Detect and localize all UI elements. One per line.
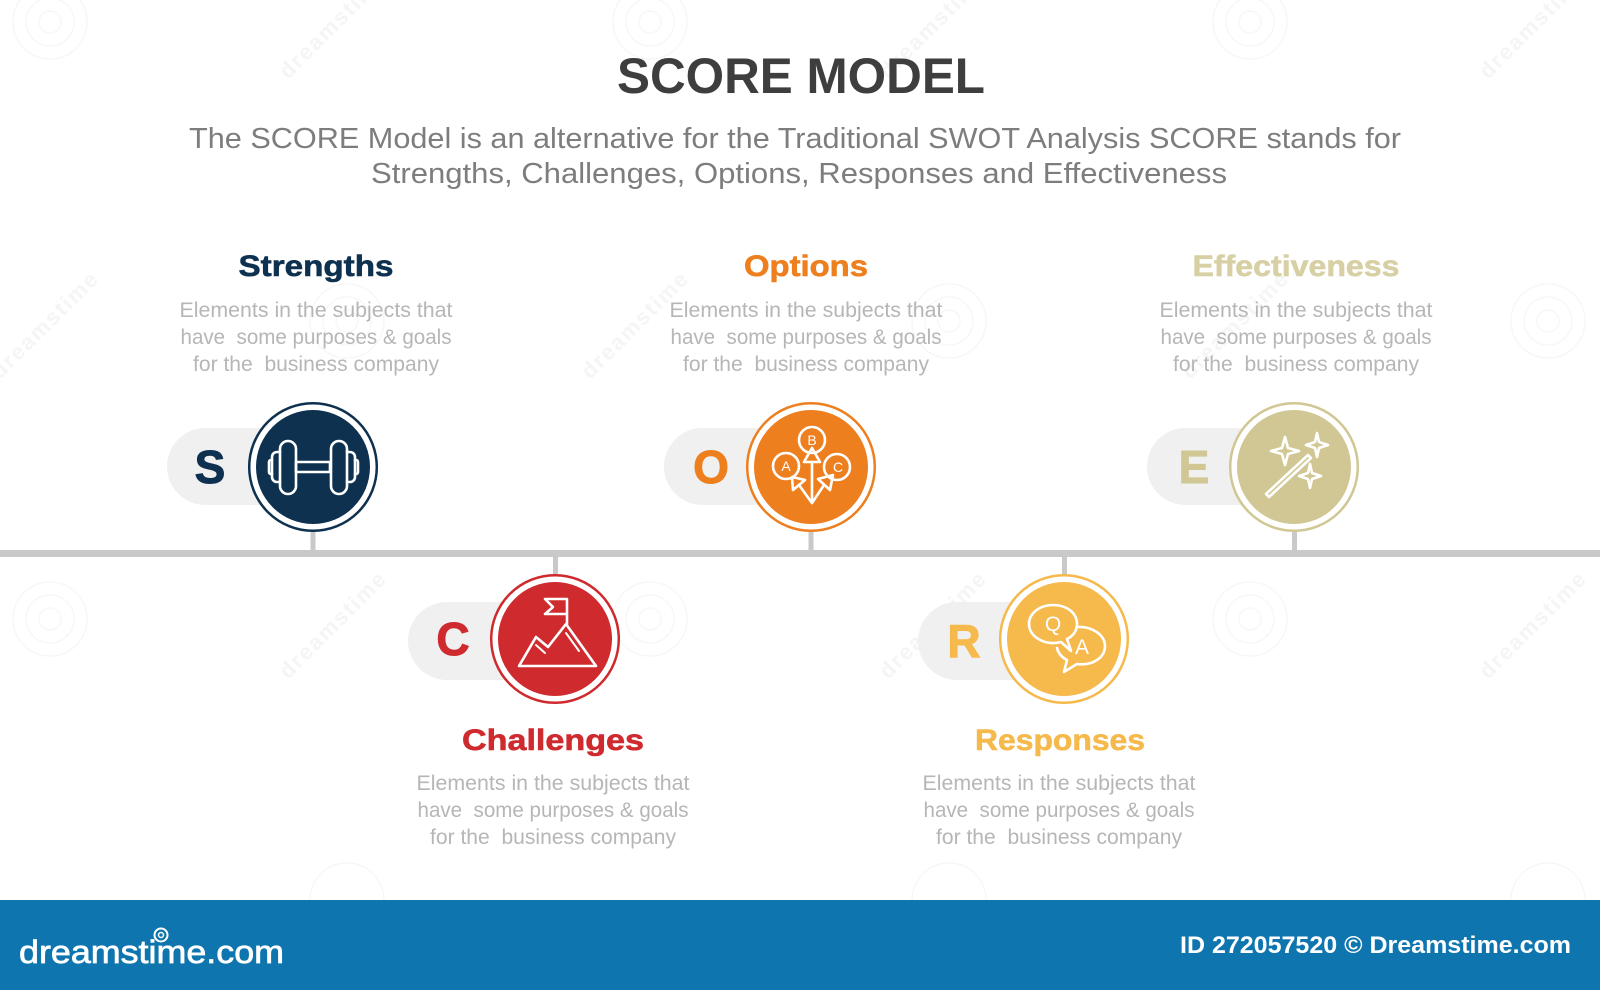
- letter pill: S: S: [195, 441, 225, 493]
- heading: effectiveness: Effectiveness: [1192, 250, 1400, 283]
- letter pill: O: [664, 428, 834, 505]
- heading: options: Options: [744, 250, 868, 283]
- text block: options description: for the business company: [683, 353, 929, 376]
- text block: responses description: for the business company: [936, 826, 1182, 849]
- panel: options: [664, 250, 943, 531]
- text block: strengths description: [180, 299, 453, 376]
- letter pill: C: [408, 602, 578, 680]
- text block: effectiveness description: Elements in the subjects that: [1160, 299, 1433, 322]
- text block: responses description: Elements in the subjects that: [922, 772, 1196, 795]
- text block: strengths description: have some purposes & goals: [180, 326, 452, 349]
- subtitle: [189, 123, 1401, 190]
- letter pill: O: O: [693, 441, 729, 493]
- panel: responses: [918, 575, 1196, 849]
- letter pill: E: [1147, 428, 1317, 505]
- icon: magic wand: [1230, 403, 1358, 531]
- heading: responses: Responses: [975, 724, 1145, 757]
- panel: effectiveness: [1147, 250, 1433, 531]
- icon: options A B C arrows: A: [781, 458, 791, 474]
- icon: Q and A speech bubbles: [1000, 575, 1128, 703]
- panel: challenges: [408, 575, 690, 849]
- letter pill: C: C: [436, 613, 470, 665]
- text block: effectiveness description: for the business company: [1173, 353, 1419, 376]
- text block: responses description: have some purposes & goals: [924, 799, 1194, 822]
- icon: options A B C arrows: B: [807, 432, 817, 448]
- text block: responses description: [922, 772, 1196, 849]
- heading: strengths: Strengths: [238, 250, 394, 283]
- icon: options A B C arrows: C: [833, 459, 843, 475]
- text block: challenges description: have some purposes & goals: [418, 799, 688, 822]
- timeline axis: [0, 530, 1600, 577]
- text block: effectiveness description: have some purposes & goals: [1160, 326, 1432, 349]
- text: dreamstime: [1474, 567, 1591, 684]
- text block: options description: Elements in the subjects that: [670, 299, 943, 322]
- icon: options A B C arrows: [747, 403, 875, 531]
- footer bar: [0, 900, 1600, 990]
- image id credit: ID 272057520 © Dreamstime.com: [1180, 932, 1571, 959]
- text: dreamstime: [874, 567, 991, 684]
- letter pill: S: [167, 428, 337, 505]
- icon: Q and A speech bubbles: Q: [1045, 613, 1061, 636]
- text block: challenges description: [416, 772, 690, 849]
- text: dreamstime: [1176, 267, 1293, 384]
- letter pill: E: E: [1179, 441, 1209, 493]
- letter pill: R: R: [947, 615, 981, 667]
- text block: challenges description: for the business company: [430, 826, 676, 849]
- heading: challenges: Challenges: [462, 724, 644, 757]
- title: SCORE MODEL: [617, 48, 985, 104]
- text block: strengths description: Elements in the subjects that: [180, 299, 453, 322]
- icon: dumbbell: [249, 403, 377, 531]
- text block: options description: have some purposes & goals: [670, 326, 942, 349]
- text: dreamstime: [274, 567, 391, 684]
- text block: challenges description: Elements in the subjects that: [416, 772, 690, 795]
- letter pill: R: [918, 602, 1088, 680]
- logo: dreamstime: dreamstime.com: [19, 934, 284, 970]
- text block: effectiveness description: [1160, 299, 1433, 376]
- icon: mountain with flag: [491, 575, 619, 703]
- text: dreamstime: [576, 267, 693, 384]
- text block: options description: [670, 299, 943, 376]
- icon: Q and A speech bubbles: A: [1075, 636, 1089, 659]
- panel: strengths: [167, 250, 453, 531]
- subtitle: Strengths, Challenges, Options, Responses and Effectiveness: [371, 158, 1227, 190]
- text block: strengths description: for the business company: [193, 353, 439, 376]
- subtitle: The SCORE Model is an alternative for the Traditional SWOT Analysis SCORE stands for: [189, 123, 1401, 155]
